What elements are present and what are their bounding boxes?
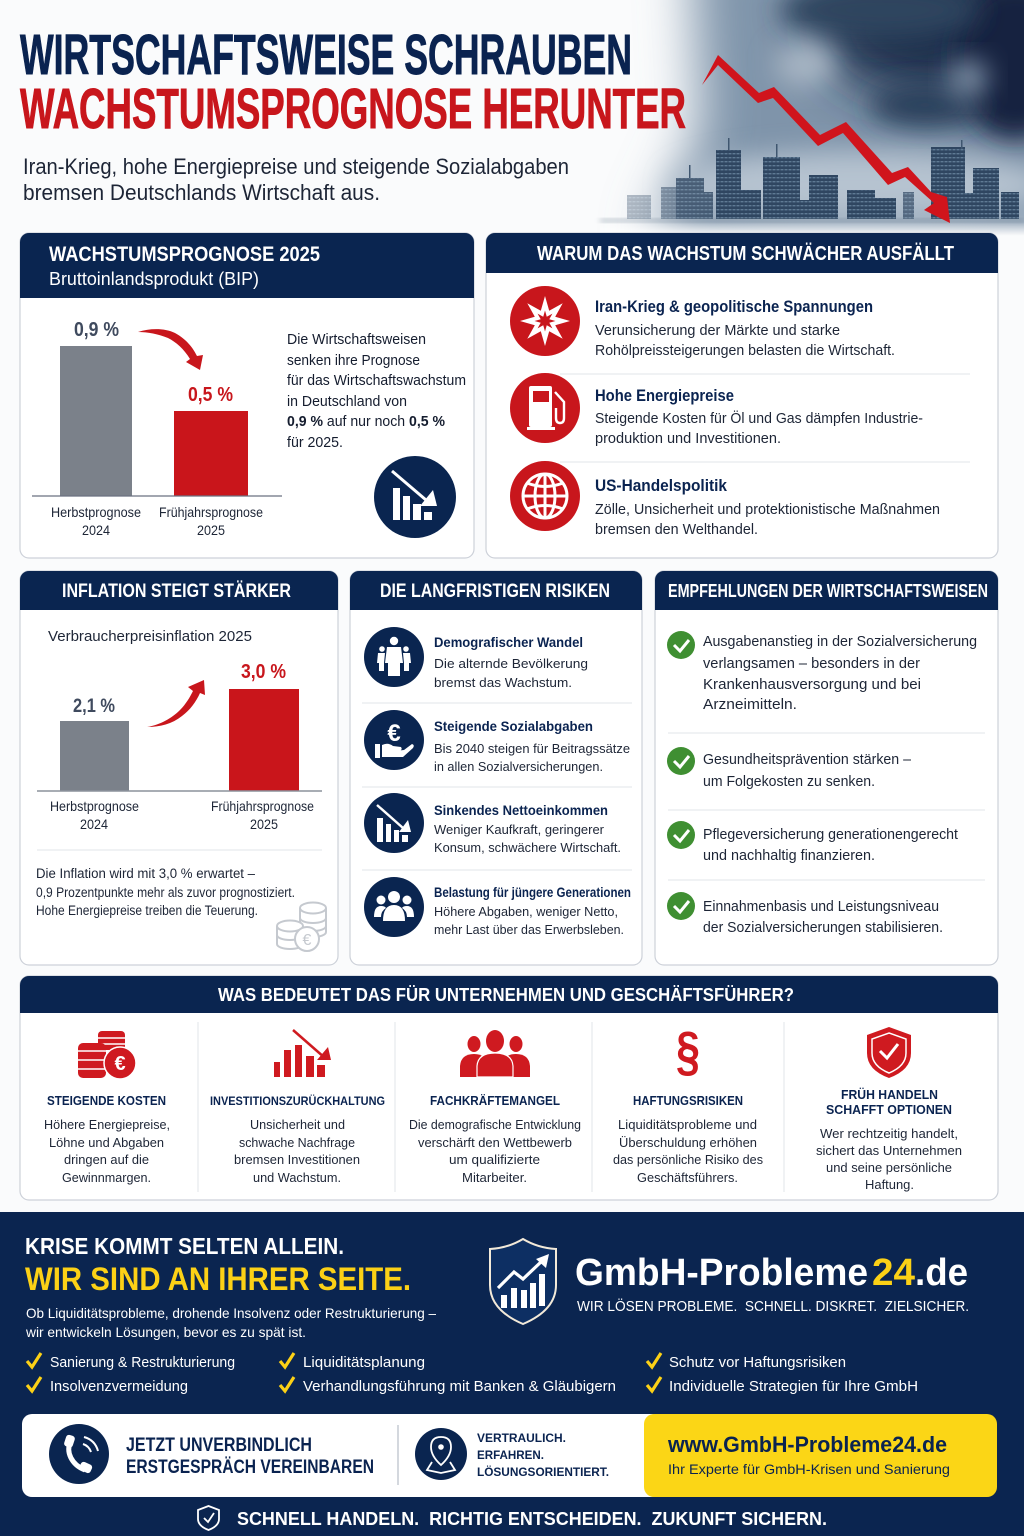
text: Steigende Sozialabgaben: Steigende Sozialabgaben bbox=[434, 719, 593, 734]
logo wordmark: GmbH-Probleme bbox=[575, 1252, 868, 1294]
column: Fachkräftemangel: Mitarbeiter. bbox=[462, 1170, 527, 1185]
bar chart: inflation: 2025 bbox=[250, 816, 278, 832]
column: Früh handeln: Haftung. bbox=[865, 1177, 914, 1192]
column: Fachkräftemangel bbox=[409, 1030, 581, 1185]
service checklist: Sanierung & Restrukturierung bbox=[50, 1354, 235, 1371]
logo wordmark: 24 bbox=[872, 1252, 915, 1294]
chart subtitle: Verbraucherpreisinflation 2025 bbox=[48, 629, 252, 645]
panel header: INFLATION STEIGT STÄRKER bbox=[62, 581, 291, 602]
call to action box bbox=[22, 1414, 662, 1497]
text: inflation note: 0,9 Prozentpunkte mehr als zuvor prognostiziert. bbox=[36, 885, 295, 900]
panel header: WAS BEDEUTET DAS FÜR UNTERNEHMEN UND GESCHÄFTSFÜHRER? bbox=[218, 984, 794, 1005]
column: Früh handeln: SCHAFFT OPTIONEN bbox=[826, 1103, 952, 1117]
text: values: VERTRAULICH. bbox=[477, 1431, 566, 1445]
column: Früh handeln: sichert das Unternehmen bbox=[816, 1143, 962, 1158]
text: Steigende Sozialabgaben: Bis 2040 steigen für Beitragssätze bbox=[434, 741, 630, 756]
text: recommendation 4: Einnahmenbasis und Leistungsniveau bbox=[703, 899, 939, 915]
text: explanation bbox=[287, 332, 466, 451]
column: Fachkräftemangel: FACHKRÄFTEMANGEL bbox=[430, 1093, 560, 1108]
panel header bbox=[20, 976, 998, 1013]
text: Handelspolitik: US-Handelspolitik bbox=[595, 477, 728, 495]
icon: green check 2 bbox=[667, 747, 695, 775]
text: Belastung jüngere Generationen: Höhere Abgaben, weniger Netto, bbox=[434, 904, 618, 919]
service checklist bbox=[27, 1353, 918, 1395]
bar chart: inflation: 2,1 % bbox=[73, 696, 115, 717]
bar chart: BIP: 0,5 % bbox=[188, 384, 233, 406]
column: Steigende Kosten: dringen auf die bbox=[64, 1152, 149, 1167]
panel header bbox=[20, 571, 338, 610]
logo shield bbox=[490, 1239, 556, 1324]
column: Früh handeln bbox=[816, 1027, 962, 1192]
website box bbox=[644, 1414, 997, 1497]
icon: euro hand: € bbox=[387, 720, 401, 747]
text: recommendation 3 bbox=[703, 827, 958, 864]
icon: declining bars bbox=[374, 456, 456, 538]
icon: declining bars bbox=[364, 793, 424, 853]
text: call to action: JETZT UNVERBINDLICH bbox=[126, 1435, 312, 1456]
text: explanation: senken ihre Prognose bbox=[287, 353, 420, 369]
bar chart: inflation: Herbstprognose bbox=[50, 798, 139, 814]
panel header bbox=[655, 571, 998, 610]
panel header bbox=[486, 233, 998, 273]
text: Demografischer Wandel: bremst das Wachstum. bbox=[434, 675, 572, 690]
text: explanation: in Deutschland von bbox=[287, 394, 407, 410]
column: Investitionszurückhaltung: und Wachstum. bbox=[253, 1170, 341, 1185]
text: values: LÖSUNGSORIENTIERT. bbox=[477, 1464, 609, 1479]
text: values: ERFAHREN. bbox=[477, 1448, 544, 1462]
title bbox=[20, 23, 686, 141]
bar chart: inflation: 3,0 % bbox=[241, 661, 286, 683]
subtitle bbox=[23, 154, 569, 205]
panel header: WARUM DAS WACHSTUM SCHWÄCHER AUSFÄLLT bbox=[537, 242, 954, 265]
arrow: prognosis down bbox=[138, 329, 203, 370]
logo wordmark: .de bbox=[915, 1252, 968, 1294]
column: Haftungsrisiken: Geschäftsführers. bbox=[637, 1170, 738, 1185]
text: inflation note bbox=[36, 866, 295, 918]
panel header bbox=[350, 571, 642, 610]
text: call to action bbox=[126, 1435, 374, 1478]
icon: explosion bbox=[510, 286, 580, 356]
icon: red people bbox=[460, 1030, 530, 1077]
text: recommendation 1: Krankenhausversorgung und bei bbox=[703, 677, 921, 693]
text: recommendation 4: der Sozialversicherungen stabilisieren. bbox=[703, 920, 943, 936]
column: Haftungsrisiken: das persönliche Risiko des bbox=[613, 1152, 763, 1167]
icon: grey coins: € bbox=[303, 932, 312, 949]
column: Haftungsrisiken: Liquiditätsprobleme und bbox=[618, 1117, 757, 1132]
bar chart: inflation bbox=[37, 661, 322, 832]
text: Demografischer Wandel: Die alternde Bevölkerung bbox=[434, 656, 588, 671]
text: explanation: Die Wirtschaftsweisen bbox=[287, 332, 426, 348]
footer headline bbox=[25, 1233, 411, 1297]
text: Iran-Krieg bbox=[595, 298, 895, 359]
text: Demografischer Wandel: Demografischer Wandel bbox=[434, 635, 583, 650]
footer headline: KRISE KOMMT SELTEN ALLEIN. bbox=[25, 1233, 344, 1259]
column: Steigende Kosten bbox=[44, 1031, 170, 1185]
text: Energiepreise: Hohe Energiepreise bbox=[595, 387, 734, 405]
icon: paragraph sign: § bbox=[676, 1020, 700, 1082]
bar chart: BIP: 2025 bbox=[197, 522, 225, 538]
footer text bbox=[25, 1305, 436, 1340]
text: Handelspolitik: Zölle, Unsicherheit und protektionistische Maßnahmen bbox=[595, 502, 940, 518]
footer text: wir entwickeln Lösungen, bevor es zu spät ist. bbox=[25, 1324, 306, 1340]
text: Sinkendes Nettoeinkommen: Weniger Kaufkraft, geringerer bbox=[434, 822, 605, 837]
icon: consultant pin bbox=[415, 1428, 467, 1480]
footer text: Ob Liquiditätsprobleme, drohende Insolvenz oder Restrukturierung – bbox=[26, 1305, 436, 1321]
text: recommendation 1: verlangsamen – besonders in der bbox=[703, 656, 920, 672]
text: Steigende Sozialabgaben bbox=[434, 719, 630, 774]
text: inflation note: Hohe Energiepreise treiben die Teuerung. bbox=[36, 903, 258, 918]
footer headline: WIR SIND AN IHRER SEITE. bbox=[25, 1261, 411, 1297]
column: Früh handeln: FRÜH HANDELN bbox=[841, 1087, 938, 1102]
panel header: WACHSTUMSPROGNOSE 2025 bbox=[49, 243, 320, 266]
text: explanation: 0,9 % auf nur noch 0,5 % bbox=[287, 414, 445, 430]
panel: Was bedeutet das für Unternehmen bbox=[20, 976, 998, 1200]
text: Demografischer Wandel bbox=[434, 635, 588, 690]
bar chart: BIP: 2024 bbox=[82, 522, 110, 538]
icon: green check 3 bbox=[667, 821, 695, 849]
text: Sinkendes Nettoeinkommen bbox=[434, 803, 621, 855]
bar chart: BIP: Herbstprognose bbox=[51, 504, 141, 520]
icon: phone bbox=[49, 1424, 109, 1484]
text: Iran-Krieg: Rohölpreissteigerungen belasten die Wirtschaft. bbox=[595, 343, 895, 359]
icon: green check 4 bbox=[667, 892, 695, 920]
column: Investitionszurückhaltung: bremsen Investitionen bbox=[234, 1152, 360, 1167]
text: Sinkendes Nettoeinkommen: Konsum, schwächere Wirtschaft. bbox=[434, 840, 621, 855]
bar chart: inflation: 2024 bbox=[80, 816, 108, 832]
title: WIRTSCHAFTSWEISE SCHRAUBEN bbox=[20, 23, 632, 87]
icon: red coins bbox=[78, 1031, 136, 1079]
text: call to action: ERSTGESPRÄCH VEREINBAREN bbox=[126, 1457, 374, 1478]
icon: green check 1 bbox=[667, 631, 695, 659]
panel: Wachstumsprognose 2025 bbox=[20, 233, 474, 558]
icon: red falling bars bbox=[274, 1030, 331, 1077]
icon: family bbox=[364, 627, 424, 687]
service checklist: Schutz vor Haftungsrisiken bbox=[669, 1354, 846, 1371]
service checklist: Verhandlungsführung mit Banken & Gläubigern bbox=[303, 1378, 616, 1395]
text: Sinkendes Nettoeinkommen: Sinkendes Nettoeinkommen bbox=[434, 803, 608, 818]
column: Fachkräftemangel: verschärft den Wettbewerb bbox=[418, 1135, 572, 1150]
panel: Warum das Wachstum schwächer ausfällt bbox=[486, 233, 998, 558]
text: recommendation 3: Pflegeversicherung generationengerecht bbox=[703, 827, 958, 843]
text: Handelspolitik bbox=[595, 477, 940, 538]
column: Steigende Kosten: STEIGENDE KOSTEN bbox=[47, 1094, 166, 1108]
text: recommendation 1 bbox=[703, 634, 977, 713]
panel header bbox=[20, 233, 474, 298]
hero image: storm sky and skyline bbox=[598, 0, 1024, 234]
column: Investitionszurückhaltung: INVESTITIONSZURÜCKHALTUNG bbox=[210, 1093, 385, 1108]
column: Früh handeln: Wer rechtzeitig handelt, bbox=[820, 1126, 958, 1141]
icon: small shield bbox=[198, 1506, 219, 1530]
column: Haftungsrisiken: HAFTUNGSRISIKEN bbox=[633, 1094, 743, 1108]
icon: grey coins bbox=[277, 902, 326, 951]
column: Steigende Kosten: Löhne und Abgaben bbox=[49, 1135, 164, 1150]
text: recommendation 2 bbox=[703, 752, 912, 790]
text: Belastung jüngere Generationen bbox=[434, 885, 631, 937]
arrow: inflation up bbox=[147, 680, 205, 727]
column: Haftungsrisiken: Überschuldung erhöhen bbox=[619, 1135, 757, 1150]
text: Energiepreise: Steigende Kosten für Öl und Gas dämpfen Industrie- bbox=[595, 409, 923, 427]
bar chart: inflation: Frühjahrsprognose bbox=[211, 798, 314, 814]
panel: Empfehlungen der Wirtschaftsweisen bbox=[655, 571, 998, 965]
column: Fachkräftemangel: Die demografische Entwicklung bbox=[409, 1117, 581, 1132]
service checklist: Individuelle Strategien für Ihre GmbH bbox=[669, 1378, 918, 1395]
service checklist: Liquiditätsplanung bbox=[303, 1354, 425, 1371]
icon: red shield bbox=[867, 1027, 911, 1078]
icon: euro hand bbox=[364, 710, 424, 770]
website box: Ihr Experte für GmbH-Krisen und Sanierung bbox=[668, 1461, 950, 1477]
text: recommendation 2: um Folgekosten zu senken. bbox=[703, 774, 875, 790]
column: Investitionszurückhaltung: Unsicherheit und bbox=[250, 1117, 345, 1132]
panel: Die langfristigen Risiken bbox=[350, 571, 642, 965]
panel header: Bruttoinlandsprodukt (BIP) bbox=[49, 269, 259, 289]
icon: group bbox=[364, 877, 424, 937]
column: Fachkräftemangel: um qualifizierte bbox=[449, 1152, 540, 1167]
text: explanation: für das Wirtschaftswachstum bbox=[287, 373, 466, 389]
subtitle: Iran-Krieg, hohe Energiepreise und steigende Sozialabgaben bbox=[23, 154, 569, 179]
text: recommendation 4 bbox=[703, 899, 943, 936]
icon: globe bbox=[510, 461, 580, 531]
column: Investitionszurückhaltung: schwache Nachfrage bbox=[239, 1135, 355, 1150]
panel header: DIE LANGFRISTIGEN RISIKEN bbox=[380, 581, 610, 602]
text: recommendation 2: Gesundheitsprävention stärken – bbox=[703, 752, 912, 768]
text: Steigende Sozialabgaben: in allen Sozialversicherungen. bbox=[434, 759, 603, 774]
column: Steigende Kosten: Gewinnmargen. bbox=[62, 1170, 151, 1185]
icon: fuel pump bbox=[510, 373, 580, 443]
text: inflation note: Die Inflation wird mit 3,0 % erwartet – bbox=[36, 866, 255, 881]
text: values bbox=[477, 1431, 609, 1479]
text: explanation: für 2025. bbox=[287, 435, 343, 451]
text: Belastung jüngere Generationen: Belastung für jüngere Generationen bbox=[434, 885, 631, 900]
footer panel bbox=[0, 1212, 1024, 1536]
text: recommendation 1: Ausgabenanstieg in der Sozialversicherung bbox=[703, 634, 977, 650]
icon: red coins: € bbox=[114, 1053, 126, 1075]
bar chart: BIP bbox=[32, 319, 282, 538]
column: Haftungsrisiken bbox=[613, 1020, 763, 1185]
text: recommendation 1: Arzneimitteln. bbox=[703, 697, 797, 713]
panel: Inflation steigt stärker bbox=[20, 571, 338, 965]
website box: www.GmbH-Probleme24.de bbox=[667, 1432, 947, 1457]
text: Energiepreise bbox=[595, 387, 923, 447]
text: Energiepreise: produktion und Investitionen. bbox=[595, 431, 781, 447]
bar chart: BIP: Frühjahrsprognose bbox=[159, 504, 263, 520]
subtitle: bremsen Deutschlands Wirtschaft aus. bbox=[23, 180, 380, 205]
column: Investitionszurückhaltung bbox=[210, 1030, 385, 1185]
service checklist: Insolvenzvermeidung bbox=[50, 1378, 188, 1395]
text: Belastung jüngere Generationen: mehr Last über das Erwerbsleben. bbox=[434, 922, 624, 937]
text: Handelspolitik: bremsen den Welthandel. bbox=[595, 522, 758, 538]
text: Iran-Krieg: Verunsicherung der Märkte und starke bbox=[595, 323, 840, 339]
logo tagline: WIR LÖSEN PROBLEME. SCHNELL. DISKRET. ZIELSICHER. bbox=[577, 1297, 969, 1315]
column: Steigende Kosten: Höhere Energiepreise, bbox=[44, 1117, 170, 1132]
footer slogan: SCHNELL HANDELN. RICHTIG ENTSCHEIDEN. ZUKUNFT SICHERN. bbox=[237, 1509, 827, 1529]
text: recommendation 3: und nachhaltig finanzieren. bbox=[703, 848, 875, 864]
text: Iran-Krieg: Iran-Krieg & geopolitische Spannungen bbox=[595, 298, 873, 316]
column: Früh handeln: und seine persönliche bbox=[826, 1160, 952, 1175]
red falling arrow bbox=[702, 55, 950, 223]
bar chart: BIP: 0,9 % bbox=[74, 319, 119, 341]
